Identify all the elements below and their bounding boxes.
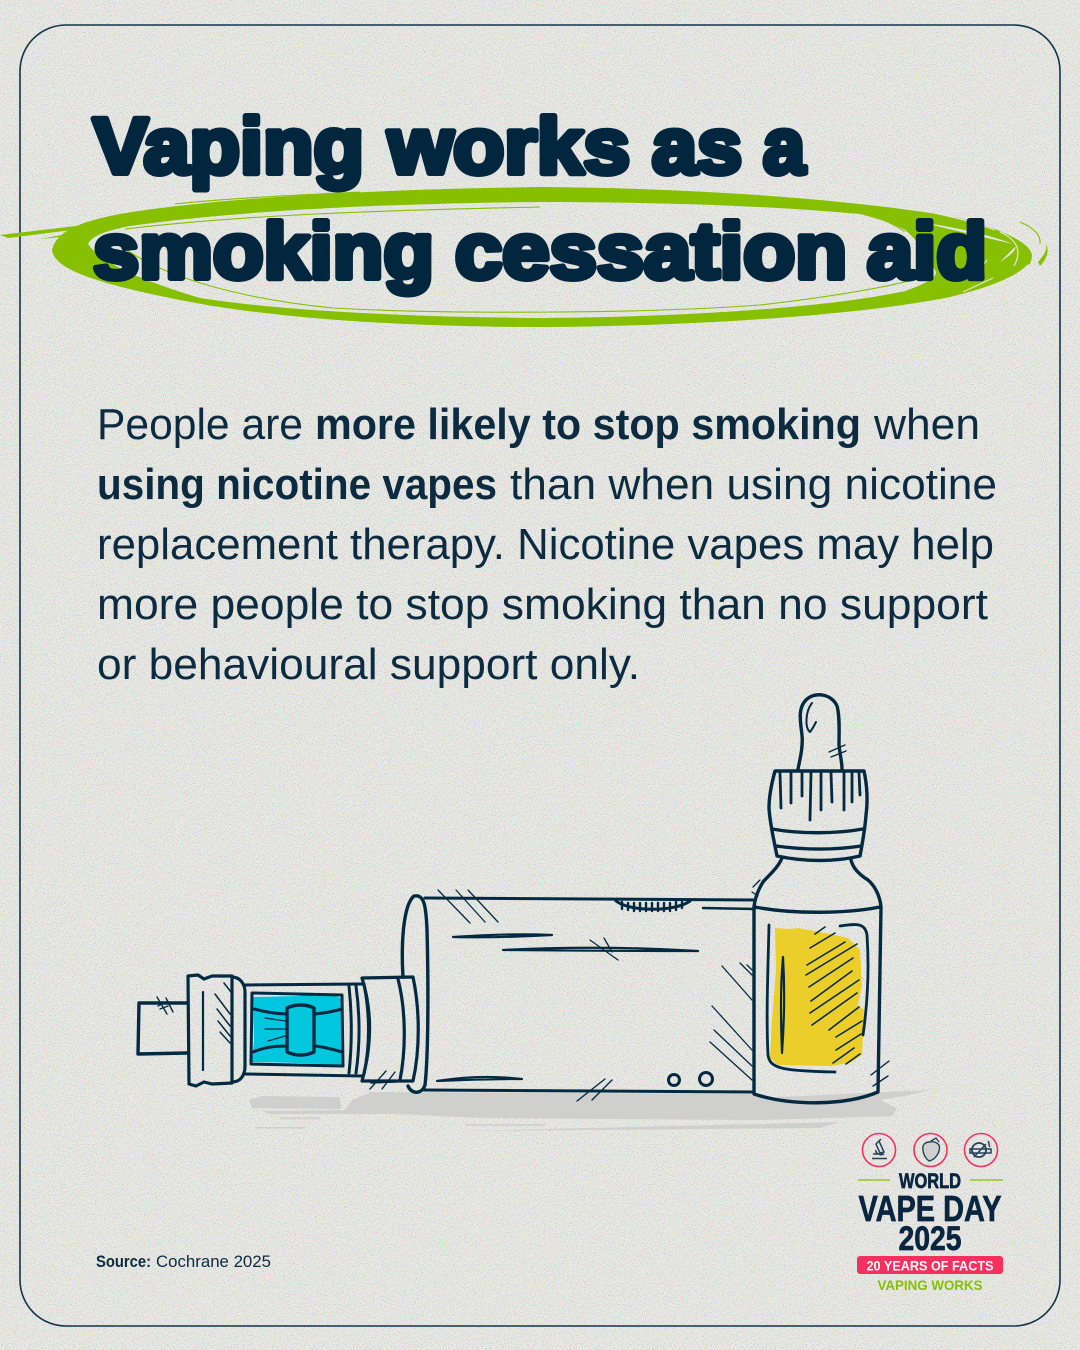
World Vape Day 2025 logo	[857, 1134, 1003, 1293]
title: smoking	[93, 206, 434, 295]
logo wordmark: 2025	[898, 1220, 962, 1258]
source note: Source:	[96, 1253, 151, 1271]
source note	[96, 1253, 271, 1271]
logo wordmark: WORLD	[899, 1170, 961, 1193]
body paragraph: more likely to stop smoking	[315, 400, 861, 449]
icon: strawberry	[914, 1134, 947, 1166]
body paragraph: more people to stop smoking than no support	[97, 580, 988, 629]
logo wordmark: VAPE DAY	[858, 1188, 1002, 1229]
bottle body	[752, 858, 889, 1103]
dropper	[798, 695, 842, 769]
cap	[769, 771, 867, 860]
title: a	[763, 101, 806, 190]
tank window blue fill	[252, 994, 342, 1065]
icon: microscope	[862, 1134, 896, 1166]
title: works	[387, 101, 630, 190]
battery body	[424, 890, 755, 1101]
tank	[245, 984, 368, 1076]
body paragraph: when	[873, 400, 980, 449]
connector	[362, 977, 418, 1089]
body paragraph: or behavioural support only.	[97, 640, 640, 689]
illustration: e-liquid bottle	[752, 695, 889, 1103]
logo rules	[858, 1179, 1003, 1181]
collar	[188, 975, 245, 1086]
illustration: vape device	[138, 890, 755, 1101]
body paragraph: replacement therapy. Nicotine vapes may help	[97, 520, 994, 569]
source note: Cochrane 2025	[156, 1253, 271, 1271]
logo wordmark	[858, 1170, 1002, 1258]
ground shadow	[249, 1090, 930, 1131]
title: as	[652, 101, 742, 190]
mouthpiece	[138, 997, 187, 1054]
body paragraph: using nicotine vapes	[97, 460, 497, 509]
logo tagline badge: 20 YEARS OF FACTS	[866, 1258, 994, 1274]
logo strapline: VAPING WORKS	[878, 1277, 982, 1293]
title: cessation	[455, 206, 847, 295]
title	[93, 101, 987, 295]
body paragraph: than when using nicotine	[510, 460, 997, 509]
icon: crossed cigarette	[964, 1134, 998, 1166]
title: Vaping	[93, 101, 364, 190]
body paragraph	[97, 400, 997, 689]
green brush ellipse highlight	[0, 187, 1048, 327]
battery cap disc	[402, 896, 428, 1092]
title: aid	[867, 206, 987, 295]
body paragraph: People are	[97, 400, 303, 449]
